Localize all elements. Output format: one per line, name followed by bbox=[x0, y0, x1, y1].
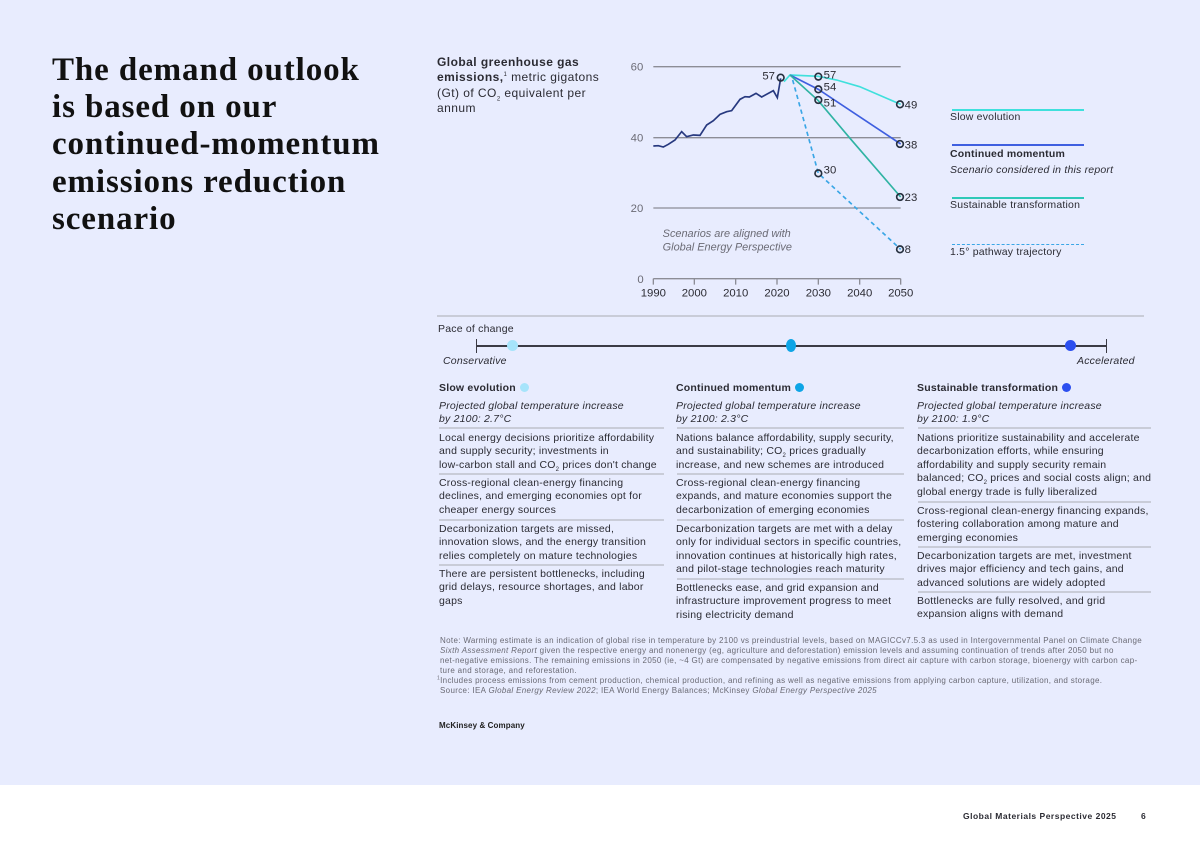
text: expands, and mature economies support the bbox=[676, 490, 892, 502]
text: drives major efficiency and tech gains, and bbox=[917, 563, 1124, 575]
chart heading: (Gt) of CO2 equivalent per bbox=[437, 86, 586, 102]
footnotes bbox=[437, 636, 1142, 695]
footnotes: net-negative emissions. The remaining emissions in 2050 (ie, ~4 Gt) are compensated by negative emissions from direct air capture with carbon storage, bioenergy with carbon cap- bbox=[440, 656, 1137, 665]
title: The demand outlook bbox=[52, 52, 360, 88]
scale heading: Pace of change bbox=[438, 323, 514, 335]
text: Decarbonization targets are missed, bbox=[439, 523, 614, 535]
heading: Continued momentum bbox=[676, 382, 791, 394]
heading: Slow evolution bbox=[439, 382, 516, 394]
data labels: 57 bbox=[762, 70, 775, 82]
text: Cross-regional clean-energy financing bbox=[439, 477, 623, 489]
legend: Scenario considered in this report bbox=[950, 164, 1113, 176]
title: is based on our bbox=[52, 89, 277, 125]
text bbox=[439, 523, 646, 562]
text bbox=[439, 432, 657, 473]
footnotes: ture and storage, and reforestation. bbox=[440, 666, 577, 675]
x-axis labels bbox=[641, 288, 913, 300]
temperature: Projected global temperature increase bbox=[917, 400, 1102, 412]
text: Nations prioritize sustainability and accelerate bbox=[917, 432, 1140, 444]
text bbox=[917, 595, 1105, 620]
text: Nations balance affordability, supply security, bbox=[676, 432, 894, 444]
text: only for individual sectors in specific countries, bbox=[676, 536, 901, 548]
text: infrastructure improvement progress to meet bbox=[676, 595, 891, 607]
text: expansion aligns with demand bbox=[917, 608, 1063, 620]
x-axis labels: 2030 bbox=[806, 288, 831, 300]
footnotes: 1Includes process emissions from cement production, chemical production, and refining as well as negative emissions from applying carbon capture, utilization, and storage. bbox=[437, 676, 1102, 685]
text: fostering collaboration among mature and bbox=[917, 518, 1119, 530]
data labels: 38 bbox=[905, 139, 917, 151]
temperature: Projected global temperature increase bbox=[439, 400, 624, 412]
legend: Slow evolution bbox=[950, 111, 1021, 123]
legend: Continued momentum bbox=[950, 148, 1065, 160]
text bbox=[676, 432, 894, 471]
text: cheaper energy sources bbox=[439, 504, 556, 516]
y-axis labels: 0 bbox=[637, 274, 644, 286]
panel: slow evolution bbox=[439, 382, 664, 607]
y-axis labels: 40 bbox=[631, 133, 643, 145]
x-axis labels: 2040 bbox=[847, 288, 872, 300]
data labels: 49 bbox=[905, 100, 917, 112]
text: Cross-regional clean-energy financing expands, bbox=[917, 505, 1149, 517]
title: scenario bbox=[52, 201, 177, 237]
text: emerging economies bbox=[917, 532, 1018, 544]
scale markers bbox=[507, 340, 518, 351]
chart heading bbox=[437, 55, 599, 115]
continued momentum line bbox=[790, 75, 901, 144]
text: low-carbon stall and CO2 prices don't change bbox=[439, 459, 657, 473]
text: relies completely on mature technologies bbox=[439, 550, 637, 562]
footer title: Global Materials Perspective 2025 bbox=[963, 811, 1117, 821]
chart heading: annum bbox=[437, 101, 476, 115]
data labels bbox=[762, 69, 917, 256]
text: and sustainability; CO2 prices gradually bbox=[676, 445, 866, 460]
temperature bbox=[439, 400, 624, 425]
temperature: by 2100: 1.9°C bbox=[917, 413, 989, 425]
text: Decarbonization targets are met, investment bbox=[917, 550, 1132, 562]
data labels: 54 bbox=[824, 81, 836, 93]
legend: slow evolution bbox=[952, 109, 1084, 110]
text: and pilot-stage technologies reach maturity bbox=[676, 563, 885, 575]
text: Cross-regional clean-energy financing bbox=[676, 477, 860, 489]
temperature bbox=[917, 400, 1102, 425]
x-axis labels: 2050 bbox=[888, 288, 913, 300]
data markers bbox=[777, 73, 903, 253]
footnotes: Source: IEA Global Energy Review 2022; IEA World Energy Balances; McKinsey Global Energy Perspective 2025 bbox=[440, 686, 877, 695]
text: innovation slows, and the energy transition bbox=[439, 536, 646, 548]
title: continued-momentum bbox=[52, 126, 380, 162]
temperature: by 2100: 2.7°C bbox=[439, 413, 511, 425]
y-axis labels: 20 bbox=[631, 203, 643, 215]
company logo text: McKinsey & Company bbox=[439, 721, 525, 730]
page number: 6 bbox=[1141, 811, 1146, 821]
chart annotation bbox=[663, 228, 792, 254]
text: innovation continues at historically high rates, bbox=[676, 550, 897, 562]
x-axis labels: 2010 bbox=[723, 288, 748, 300]
text: rising electricity demand bbox=[676, 609, 794, 621]
title: emissions reduction bbox=[52, 164, 346, 200]
text: declines, and emerging economies opt for bbox=[439, 490, 642, 502]
x-axis labels: 2020 bbox=[764, 288, 790, 300]
data labels: 51 bbox=[824, 98, 836, 110]
y-axis labels bbox=[631, 62, 644, 286]
page footer bbox=[963, 811, 1146, 821]
slow evolution line bbox=[784, 75, 901, 104]
line chart: emissions scenarios bbox=[630, 62, 917, 300]
text: gaps bbox=[439, 595, 463, 607]
panel: continued momentum bbox=[676, 382, 904, 621]
legend: sustainable transformation bbox=[952, 197, 1084, 198]
legend: 1.5° pathway trajectory bbox=[950, 246, 1062, 258]
text: Bottlenecks are fully resolved, and grid bbox=[917, 595, 1105, 607]
pace of change scale bbox=[438, 323, 1135, 367]
heading: Sustainable transformation bbox=[917, 382, 1058, 394]
historical emissions line bbox=[653, 78, 781, 147]
text: global energy trade is fully liberalized bbox=[917, 486, 1097, 498]
1.5 degree pathway line bbox=[793, 80, 901, 249]
text: and supply security; investments in bbox=[439, 445, 609, 457]
text bbox=[917, 550, 1132, 589]
text: grid delays, resource shortages, and labor bbox=[439, 581, 644, 593]
text bbox=[917, 432, 1151, 498]
chart annotation: Scenarios are aligned with bbox=[663, 228, 791, 240]
temperature: Projected global temperature increase bbox=[676, 400, 861, 412]
text bbox=[439, 568, 645, 607]
temperature: by 2100: 2.3°C bbox=[676, 413, 748, 425]
text: Bottlenecks ease, and grid expansion and bbox=[676, 582, 879, 594]
sustainable transformation line bbox=[790, 75, 901, 197]
x-axis labels: 1990 bbox=[641, 288, 666, 300]
text bbox=[676, 523, 901, 575]
text bbox=[439, 477, 642, 516]
panel: sustainable transformation bbox=[917, 382, 1151, 620]
text: There are persistent bottlenecks, including bbox=[439, 568, 645, 580]
chart annotation: Global Energy Perspective bbox=[663, 242, 792, 254]
text: Local energy decisions prioritize affordability bbox=[439, 432, 654, 444]
footnotes: Note: Warming estimate is an indication of global rise in temperature by 2100 vs preindustrial levels, based on MAGICCv7.5.3 as used in Intergovernmental Panel on Climate Change bbox=[440, 636, 1142, 645]
text: decarbonization of emerging economies bbox=[676, 504, 870, 516]
temperature bbox=[676, 400, 861, 425]
legend: Sustainable transformation bbox=[950, 199, 1080, 211]
scale axis bbox=[477, 345, 1107, 347]
legend: continued momentum bbox=[952, 144, 1084, 146]
x-axis labels: 2000 bbox=[682, 288, 707, 300]
scale end labels: Conservative bbox=[443, 355, 507, 367]
text: affordability and supply security remain bbox=[917, 459, 1106, 471]
data labels: 57 bbox=[824, 69, 836, 81]
text bbox=[917, 505, 1149, 544]
text: advanced solutions are widely adopted bbox=[917, 577, 1105, 589]
text: balanced; CO2 prices and social costs align; and bbox=[917, 472, 1151, 486]
data labels: 23 bbox=[905, 192, 917, 204]
data labels: 8 bbox=[905, 244, 911, 256]
chart heading: Global greenhouse gas bbox=[437, 55, 579, 69]
text: increase, and new schemes are introduced bbox=[676, 459, 884, 471]
data labels: 30 bbox=[824, 165, 836, 177]
y-axis labels: 60 bbox=[631, 62, 643, 74]
text bbox=[676, 477, 892, 516]
title bbox=[52, 52, 380, 237]
pace of change scale: Accelerated bbox=[1077, 355, 1135, 367]
gridlines and axis bbox=[653, 67, 901, 285]
text: Decarbonization targets are met with a delay bbox=[676, 523, 893, 535]
footnotes: Sixth Assessment Report given the respective energy and nonenergy (eg, agriculture and deforestation) emission levels and assuming continuation of trends after 2050 but no bbox=[440, 646, 1114, 655]
legend: 1.5 degree pathway bbox=[952, 244, 1084, 245]
text: decarbonization efforts, while ensuring bbox=[917, 445, 1104, 457]
text bbox=[676, 582, 891, 621]
legend bbox=[950, 109, 1114, 258]
chart heading: emissions,1 metric gigatons bbox=[437, 70, 599, 84]
